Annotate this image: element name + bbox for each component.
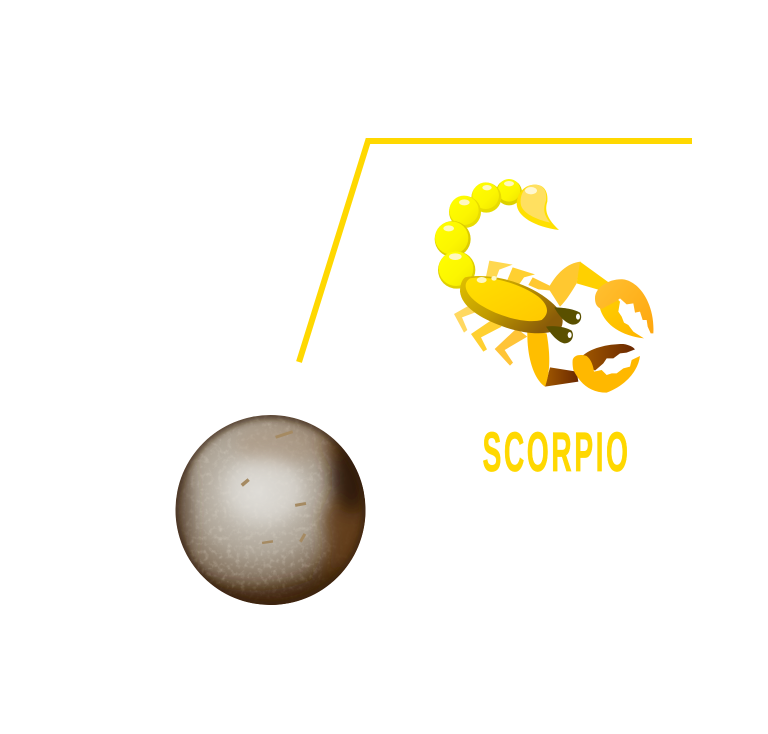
scorpion tail [435, 179, 559, 289]
surface speckle [184, 416, 331, 597]
scorpion upper arm and claw [548, 262, 653, 338]
yellow pointer line [299, 141, 692, 362]
scorpion legs [454, 261, 552, 366]
title: SCORPIO: SCORPIO [482, 420, 630, 483]
infographic canvas [176, 138, 692, 605]
planet: Pluto [176, 415, 366, 605]
scorpion lower arm and claw [527, 330, 640, 393]
scorpion body [460, 276, 563, 333]
tan upper patch [235, 425, 325, 465]
surface marks [241, 430, 306, 544]
scorpion eyes [546, 307, 581, 343]
dark rim [176, 415, 366, 605]
icon: scorpion [435, 179, 653, 393]
shaded limb [176, 432, 366, 605]
bright centre [225, 458, 305, 522]
